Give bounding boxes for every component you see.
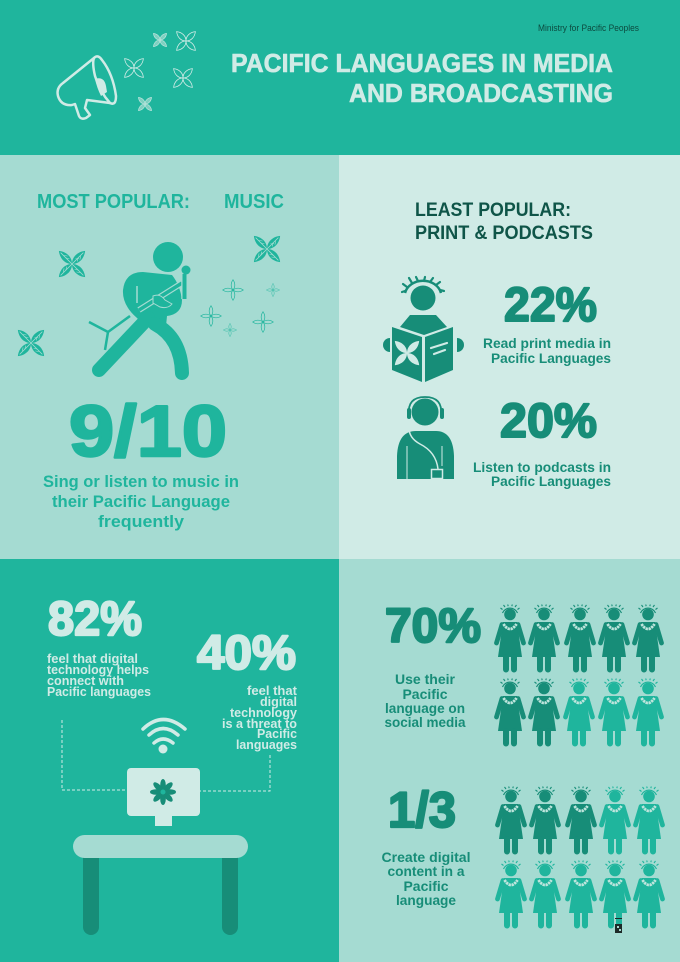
caption: create digital content: Pacific (404, 878, 449, 894)
heading: least popular: PRINT & PODCASTS (415, 222, 593, 244)
caption: digital technology threat: feel that (247, 684, 298, 698)
icon: person with headphones (397, 397, 454, 479)
pictogram: seven in ten women (496, 604, 662, 744)
caption: read print media (483, 336, 611, 366)
icon: monitor with flower (127, 768, 200, 826)
icon: singer playing guitar (89, 242, 190, 373)
caption: digital technology helps: feel that digital (47, 652, 138, 666)
icon: table (73, 835, 248, 935)
caption: create digital content: content in a (388, 863, 465, 879)
caption: create digital content: Create digital (382, 849, 470, 865)
caption: digital technology threat: languages (236, 738, 297, 752)
caption: listen to podcasts (473, 460, 611, 489)
heading: music: MUSIC (224, 191, 284, 213)
icon: wifi signal (143, 720, 185, 754)
panel: most popular music (0, 155, 339, 559)
small black mark (615, 918, 622, 933)
caption: sing or listen: frequently (98, 513, 185, 531)
statistic: 70%: 70% (385, 600, 481, 653)
statistic: 40%: 40% (197, 627, 296, 680)
caption: digital technology helps: Pacific languages (47, 685, 151, 699)
caption: digital technology threat: technology (230, 706, 297, 720)
caption: sing or listen: Sing or listen to music in (43, 473, 239, 491)
panel: least popular print and podcasts (339, 155, 680, 559)
caption: use their language: Use their (395, 671, 456, 687)
caption: digital technology helps: technology helps (47, 663, 149, 677)
caption: use their language: Pacific (402, 686, 448, 702)
statistic: 9/10: 9/10 (69, 392, 227, 472)
caption: digital technology threat (222, 684, 298, 752)
caption: digital technology helps: connect with (47, 674, 124, 688)
caption: create digital content (382, 849, 470, 908)
caption: digital technology helps (47, 652, 151, 699)
heading: most popular: MOST POPULAR: (37, 191, 190, 213)
caption: digital technology threat: is a threat to (222, 717, 297, 731)
caption: listen to podcasts: Listen to podcasts in (473, 460, 611, 475)
connector: dashed lines to monitor (62, 720, 270, 791)
icon: megaphone (58, 56, 116, 119)
icon: header flowers (125, 32, 195, 111)
icon: person reading book (383, 277, 464, 382)
caption: sing or listen (43, 473, 239, 531)
caption: create digital content: language (396, 892, 456, 908)
panel: social media and digital content (339, 559, 680, 962)
pictogram: one in three women (498, 786, 662, 926)
caption: use their language (384, 671, 466, 730)
caption: digital technology threat: Pacific (257, 727, 297, 741)
statistic: 20%: 20% (500, 395, 597, 448)
panel: digital technology (0, 559, 339, 962)
statistic: 22%: 22% (504, 279, 597, 332)
heading: least popular: LEAST POPULAR: (415, 199, 571, 221)
caption: use their language: social media (384, 714, 466, 730)
statistic: 1/3: 1/3 (388, 782, 456, 838)
caption: digital technology threat: digital (260, 695, 297, 709)
caption: read print media: Read print media in (483, 336, 611, 351)
source credit: Ministry for Pacific Peoples (538, 23, 639, 33)
caption: listen to podcasts: Pacific Languages (491, 474, 611, 489)
caption: sing or listen: their Pacific Language (52, 493, 230, 511)
statistic: 82%: 82% (48, 593, 142, 646)
title: PACIFIC LANGUAGES IN MEDIA (231, 50, 613, 78)
icon: green leaves around singer (18, 236, 280, 356)
title (231, 50, 613, 108)
caption: read print media: Pacific Languages (491, 351, 611, 366)
title: AND BROADCASTING (349, 80, 613, 108)
heading: least popular (415, 199, 593, 244)
caption: use their language: language on (385, 700, 465, 716)
background panel: header (0, 0, 680, 155)
